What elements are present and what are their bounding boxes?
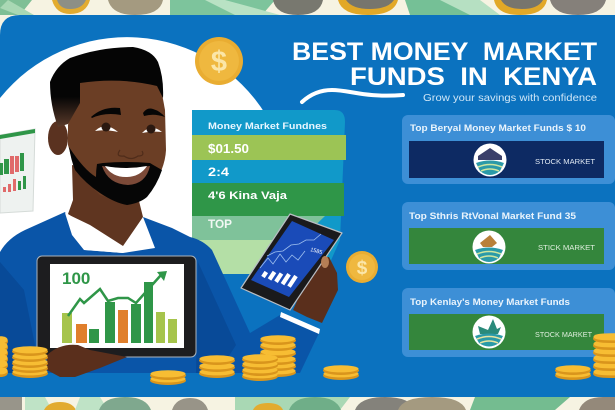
subtitle: Grow your savings with confidence [423, 92, 597, 104]
suit [0, 212, 319, 373]
eyebrows [91, 108, 165, 118]
shirt collar [65, 213, 155, 253]
large tablet [37, 256, 196, 357]
icon: large dollar coin: $ [211, 46, 227, 78]
table value 4: TOP [208, 217, 232, 231]
small tablet [241, 214, 342, 310]
funds table [192, 110, 346, 274]
small tablet line [260, 234, 321, 268]
character [0, 47, 319, 373]
card 1 [402, 115, 615, 184]
icon: small dollar coin: $ [357, 258, 368, 279]
icon: small dollar coin [346, 251, 378, 283]
thumb [321, 256, 329, 268]
beard [69, 147, 162, 205]
floating chart sheet [0, 129, 35, 213]
small tablet hand [293, 257, 338, 323]
tablet trend arrow [68, 275, 161, 316]
card 1 heading: Top Beryal Money Market Funds $ 10 [410, 123, 586, 134]
table value 3: 4'6 Kina Vaja [208, 190, 288, 202]
title swoosh [302, 90, 403, 102]
table heading: Money Market Fundnes [208, 121, 327, 132]
card 3 label: STOCK MARKET [535, 330, 592, 339]
face [68, 69, 166, 205]
hand under tablet [47, 345, 127, 377]
card 2 logo [472, 230, 506, 264]
card 3 logo [472, 316, 506, 348]
neck [68, 165, 146, 250]
smile [105, 166, 147, 177]
coin stacks [0, 333, 615, 385]
small tablet bars [263, 272, 296, 287]
title: BEST MONEY MARKET [292, 38, 597, 66]
title [292, 38, 597, 91]
card 3 heading: Top Kenlay's Money Market Funds [410, 297, 570, 308]
hair [50, 47, 163, 127]
eyes [95, 126, 162, 133]
tablet number: 100 [62, 269, 90, 288]
white circle backdrop [0, 37, 266, 373]
icon: large dollar coin [195, 37, 243, 85]
title: FUNDS IN KENYA [350, 63, 597, 91]
suit shadow [0, 262, 236, 373]
card 2 label: STICK MARKET [538, 243, 595, 252]
ear [48, 121, 68, 155]
card 1 label: STOCK MARKET [535, 157, 595, 166]
card 3 [402, 288, 615, 357]
table value 1: $01.50 [208, 141, 249, 156]
cuff [280, 312, 320, 334]
nose [118, 150, 143, 158]
card 2 [402, 202, 615, 270]
card 1 logo [474, 144, 506, 176]
lip area [102, 166, 150, 185]
small tablet number: 1585 [309, 247, 323, 256]
table surface [0, 373, 320, 397]
tablet bars [62, 282, 177, 343]
card 2 heading: Top Sthris RtVonal Market Fund 35 [409, 211, 577, 222]
table value 2: 2:4 [208, 165, 229, 179]
